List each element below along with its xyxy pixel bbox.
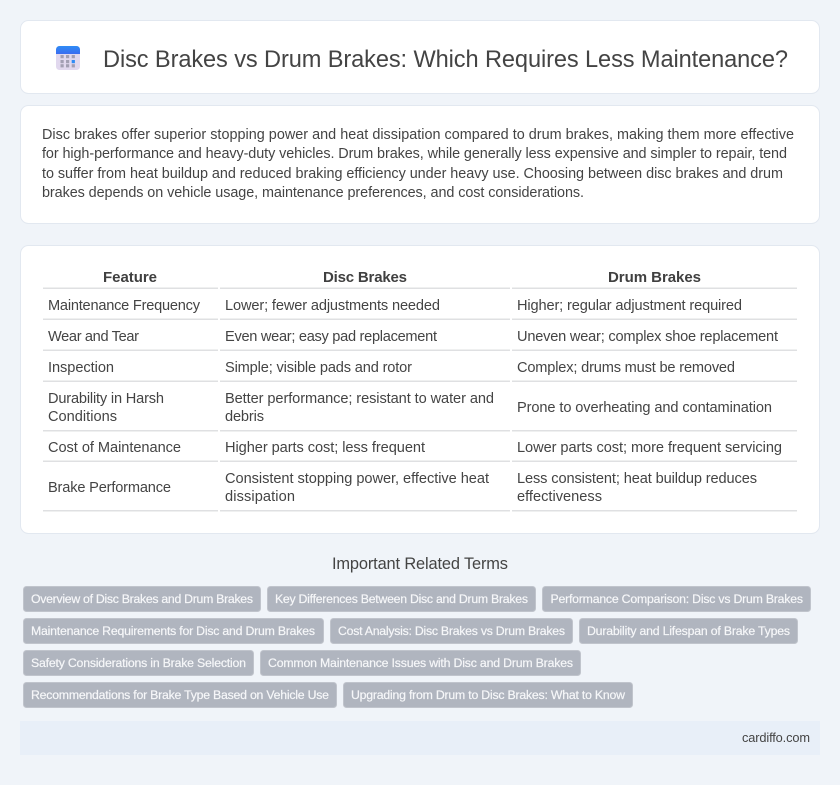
table row: durability in harsh conditions: Prone to overheating and contamination	[517, 400, 772, 416]
tag	[24, 650, 254, 676]
title: Disc Brakes vs Drum Brakes: Which Requires Less Maintenance?	[103, 47, 788, 73]
table row: brake performance: Less consistent; heat buildup reduces	[517, 471, 757, 487]
text block: introduction: for high-performance and heavy-duty vehicles. Drum brakes, while generally less expensive and simpler to repair, tend	[42, 146, 787, 162]
table row: brake performance: Consistent stopping power, effective heat	[225, 471, 489, 487]
table row: maintenance frequency: Maintenance Frequency	[48, 298, 201, 314]
table row: brake performance: dissipation	[225, 489, 295, 505]
tag: Upgrading from Drum to Disc Brakes: What to Know	[351, 688, 625, 702]
table row: maintenance frequency	[48, 298, 742, 314]
table row: cost of maintenance: Lower parts cost; more frequent servicing	[517, 440, 782, 456]
footer: cardiffo.com	[742, 730, 810, 745]
table header row: Disc Brakes	[323, 269, 407, 286]
text block: introduction: to suffer from heat buildup and reduced braking efficiency under heavy use. Choosing between disc brakes and drum	[42, 166, 783, 182]
panel: header	[20, 20, 820, 94]
tag: Durability and Lifespan of Brake Types	[587, 624, 790, 638]
table row: durability in harsh conditions	[48, 391, 772, 425]
text block: introduction: brakes depends on vehicle usage, maintenance preferences, and cost considerations.	[42, 185, 584, 201]
panel: related term tags	[24, 586, 810, 708]
tag	[330, 618, 572, 644]
tag: Performance Comparison: Disc vs Drum Brakes	[550, 592, 803, 606]
tag	[344, 682, 632, 708]
table row: cost of maintenance: Higher parts cost; less frequent	[225, 440, 425, 456]
tag: Maintenance Requirements for Disc and Drum Brakes	[31, 624, 315, 638]
table row: wear and tear: Wear and Tear	[48, 329, 139, 345]
tag	[24, 586, 260, 612]
tag	[580, 618, 798, 644]
panel: comparison table	[20, 246, 820, 534]
table row: durability in harsh conditions: Durability in Harsh	[48, 391, 164, 407]
tag: Safety Considerations in Brake Selection	[31, 656, 246, 670]
table row: cost of maintenance	[48, 440, 782, 456]
tag	[24, 682, 336, 708]
table row: inspection: Complex; drums must be removed	[517, 360, 735, 376]
tag	[268, 586, 536, 612]
table row: inspection	[48, 360, 735, 376]
icon: calendar	[56, 46, 80, 70]
tag	[260, 650, 580, 676]
tag: Overview of Disc Brakes and Drum Brakes	[31, 592, 253, 606]
table row: durability in harsh conditions: Conditions	[48, 409, 117, 425]
tag	[542, 586, 810, 612]
table row: wear and tear	[48, 329, 778, 345]
table row: brake performance: effectiveness	[517, 489, 602, 505]
panel: introduction	[20, 106, 820, 224]
tag	[24, 618, 324, 644]
table row: maintenance frequency: Lower; fewer adjustments needed	[225, 298, 440, 314]
table row: brake performance: Brake Performance	[48, 480, 171, 496]
table row: wear and tear: Uneven wear; complex shoe replacement	[517, 329, 778, 345]
table row: brake performance	[48, 471, 757, 505]
heading: important related terms: Important Related Terms	[332, 555, 508, 573]
tag: Common Maintenance Issues with Disc and Drum Brakes	[268, 656, 573, 670]
table row: wear and tear: Even wear; easy pad replacement	[225, 329, 437, 345]
table header row: Feature	[103, 269, 157, 286]
table header row	[103, 269, 701, 286]
tag: Cost Analysis: Disc Brakes vs Drum Brakes	[338, 624, 565, 638]
table row: cost of maintenance: Cost of Maintenance	[48, 440, 181, 456]
table header row: Drum Brakes	[608, 269, 701, 286]
text block: introduction	[42, 127, 794, 201]
table row: durability in harsh conditions: Better performance; resistant to water and	[225, 391, 494, 407]
text block: introduction: Disc brakes offer superior stopping power and heat dissipation compared to drum brakes, making them more effective	[42, 127, 794, 143]
footer	[20, 721, 820, 755]
table row: inspection: Simple; visible pads and rotor	[225, 360, 412, 376]
table row: inspection: Inspection	[48, 360, 114, 376]
tag: Recommendations for Brake Type Based on Vehicle Use	[31, 688, 329, 702]
table row: maintenance frequency: Higher; regular adjustment required	[517, 298, 742, 314]
table row: durability in harsh conditions: debris	[225, 409, 264, 425]
tag: Key Differences Between Disc and Drum Brakes	[275, 592, 528, 606]
